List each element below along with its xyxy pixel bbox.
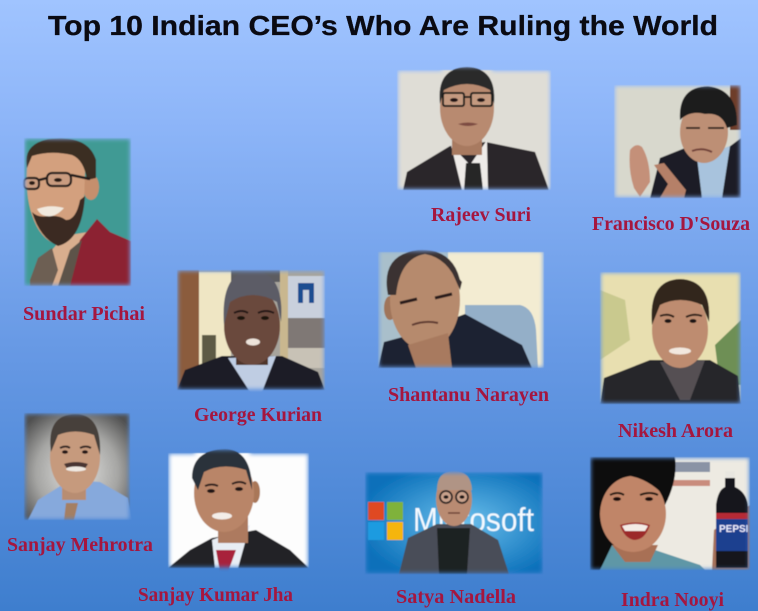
profile: George Kurian xyxy=(177,270,325,426)
name: Francisco D'Souza: Francisco D'Souza xyxy=(592,213,750,235)
photo: Indra Nooyi xyxy=(590,457,750,570)
profile: Sanjay Kumar Jha xyxy=(138,449,309,606)
logo: Microsoft squares xyxy=(368,502,403,540)
name: Sanjay Kumar Jha: Sanjay Kumar Jha xyxy=(138,584,293,606)
photo: George Kurian xyxy=(177,270,325,392)
profile: Shantanu Narayen xyxy=(378,250,549,406)
name: George Kurian: George Kurian xyxy=(194,404,322,426)
name: Indra Nooyi: Indra Nooyi xyxy=(621,589,724,611)
name: Sanjay Mehrotra: Sanjay Mehrotra xyxy=(7,534,153,556)
name: Rajeev Suri: Rajeev Suri xyxy=(431,204,531,226)
photo: Sanjay Kumar Jha xyxy=(168,449,309,572)
profile: Sundar Pichai xyxy=(23,138,145,325)
photo: Sanjay Mehrotra xyxy=(24,413,132,520)
profile: Indra Nooyi xyxy=(590,457,750,611)
photo: Shantanu Narayen xyxy=(378,250,544,368)
name: Shantanu Narayen: Shantanu Narayen xyxy=(388,384,549,406)
photo: Indra Nooyi: PEPSI xyxy=(719,524,749,535)
profile: Sanjay Mehrotra xyxy=(7,413,153,556)
title: Top 10 Indian CEO’s Who Are Ruling the World xyxy=(48,10,718,41)
photo: Satya Nadella xyxy=(365,471,543,574)
name: Satya Nadella: Satya Nadella xyxy=(396,586,516,608)
profile: Francisco D'Souza xyxy=(592,85,750,235)
photo: Satya Nadella: Microsoft xyxy=(413,501,534,538)
profile: Satya Nadella xyxy=(365,471,543,608)
profile: Nikesh Arora xyxy=(600,272,741,442)
profile: Rajeev Suri xyxy=(397,67,551,226)
name: Nikesh Arora: Nikesh Arora xyxy=(618,420,733,442)
photo: Francisco D'Souza xyxy=(614,85,741,198)
name: Sundar Pichai: Sundar Pichai xyxy=(23,303,145,325)
photo: Sundar Pichai xyxy=(24,138,131,286)
photo: Rajeev Suri xyxy=(397,67,551,190)
photo: Nikesh Arora xyxy=(600,272,741,404)
